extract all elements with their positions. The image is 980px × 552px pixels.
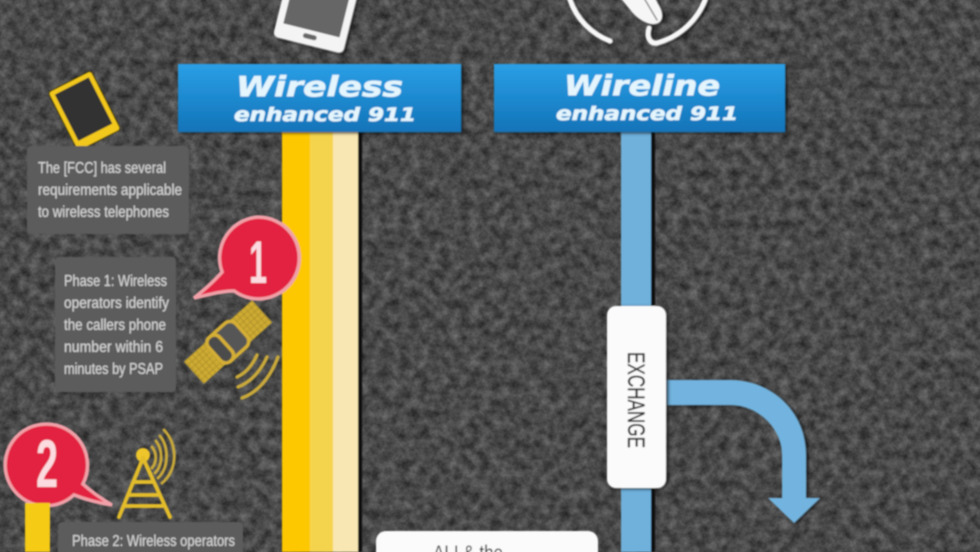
panel: FCC requirements: to wireless telephones [38, 204, 169, 221]
wireless branch line [25, 503, 50, 552]
banner: wireless: enhanced 911 [234, 104, 416, 126]
panel: phase 1: number within 6 [64, 339, 163, 356]
panel: phase 1: the callers phone [64, 317, 166, 334]
panel: FCC requirements: The [FCC] has several [38, 160, 166, 177]
icon: radio tower [119, 430, 174, 517]
panel: phase 1: operators identify [64, 295, 169, 312]
icon: wireline handset in circle [570, 0, 705, 43]
exchange box: EXCHANGE [622, 352, 649, 448]
panel: phase 1: minutes by PSAP [64, 361, 163, 378]
icon: yellow tablet [48, 71, 121, 151]
arrow: exchange branch [664, 380, 820, 523]
badge: number 1 [194, 217, 299, 299]
banner: wireline: Wireline [564, 69, 720, 102]
panel: FCC requirements: requirements applicable [38, 182, 182, 199]
icon: satellite [183, 299, 278, 398]
exchange box [607, 306, 666, 488]
ALI box [376, 531, 598, 552]
banner: wireline [494, 64, 785, 132]
banner: wireline: enhanced 911 [556, 103, 738, 125]
panel: phase 1: Phase 1: Wireless [64, 273, 167, 290]
banner: wireless: Wireless [236, 70, 403, 103]
icon: white smartphone [273, 0, 363, 54]
wireline blue line [621, 132, 655, 552]
panel: phase 2 [58, 522, 243, 552]
panel: FCC requirements [27, 146, 189, 234]
badge: number 1: 1 [249, 229, 267, 296]
panel: phase 1 [55, 257, 176, 392]
badge: number 2 [5, 424, 112, 506]
panel: phase 2: Phase 2: Wireless operators [72, 533, 235, 550]
wireless yellow road [282, 132, 362, 552]
badge: number 2: 2 [36, 426, 58, 502]
banner: wireless [178, 64, 461, 132]
